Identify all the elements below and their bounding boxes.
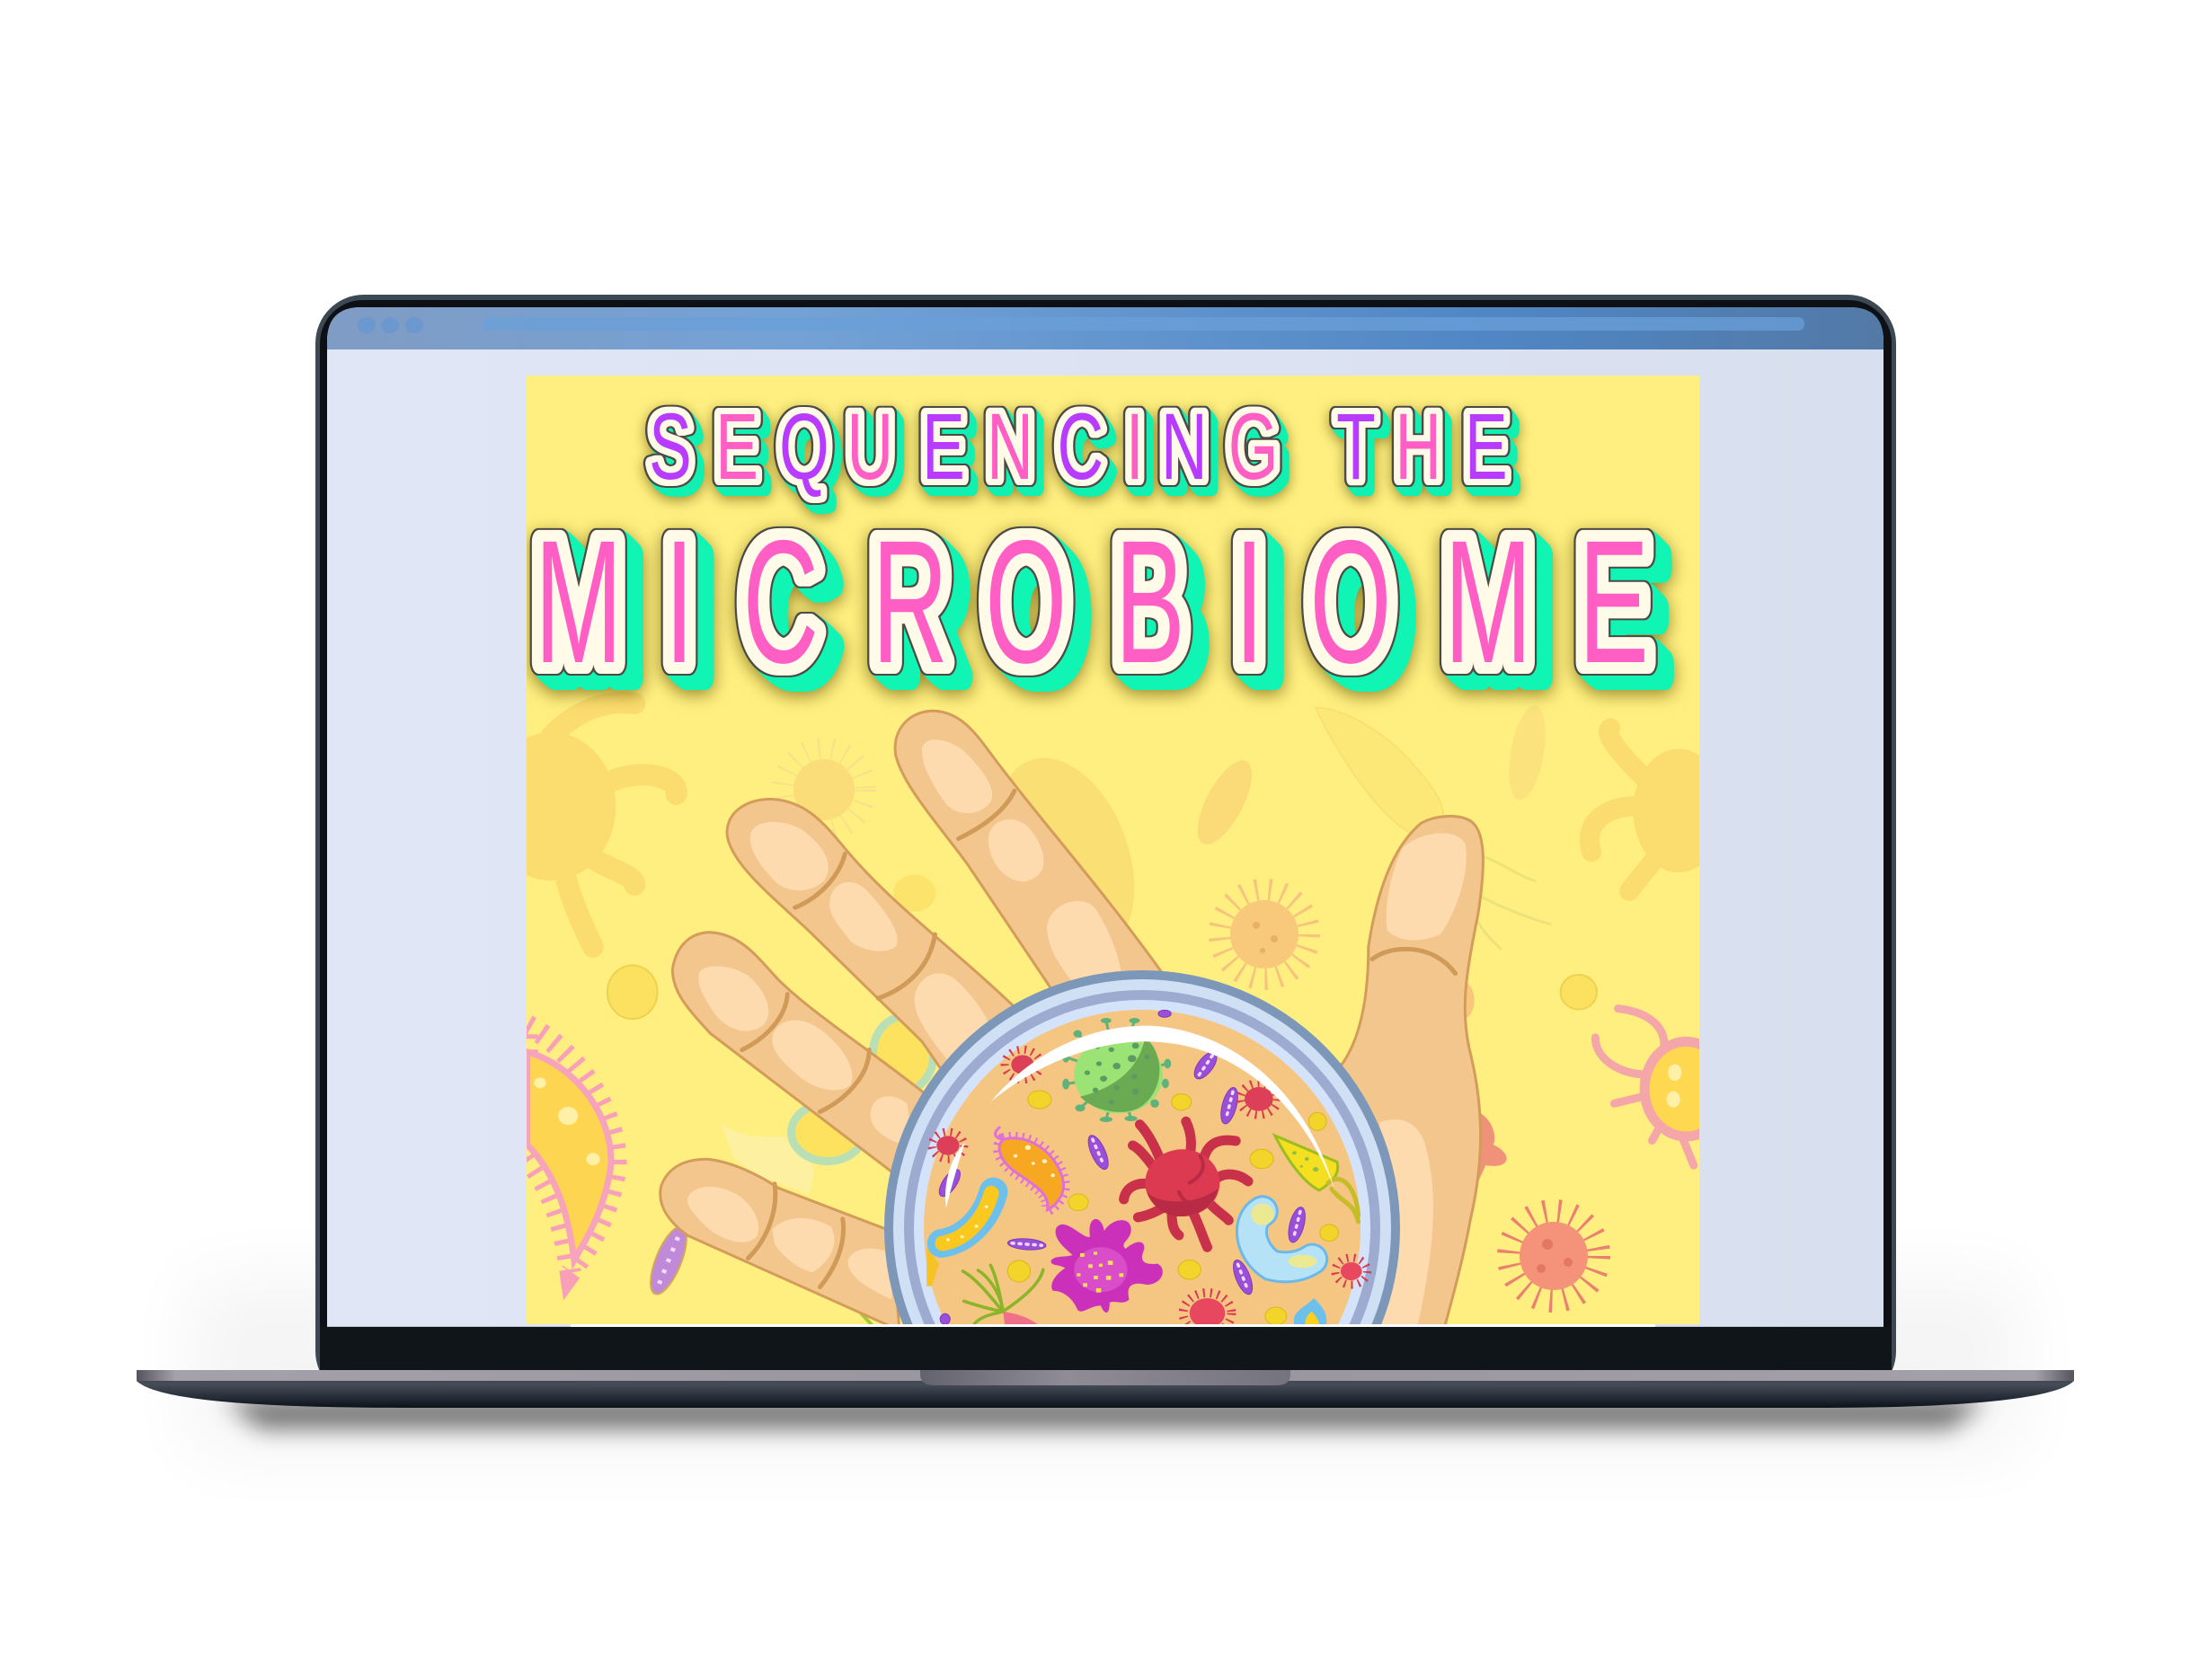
glass highlight — [945, 1026, 1335, 1208]
green plant microbe — [963, 1265, 1043, 1325]
orange sun microbe — [1219, 889, 1309, 979]
screen background — [327, 307, 1883, 1327]
title line: microbiome: MICROBIOME — [535, 504, 1649, 700]
title line: microbiome: MICROBIOME — [535, 504, 1649, 700]
purple pill microbe — [650, 1227, 687, 1295]
red tentacled microbe — [1124, 1121, 1248, 1247]
small red viruses — [932, 1049, 1367, 1333]
small yellow cells — [926, 1091, 1338, 1325]
center notch — [920, 1370, 1290, 1385]
green virus — [1062, 1018, 1171, 1122]
orange paisley microbe — [996, 1127, 1064, 1210]
bottom cut-off page strip — [327, 1324, 1883, 1327]
coral sun microbe — [1509, 1211, 1599, 1301]
spiky left microbe — [527, 1025, 616, 1273]
faded background microbes — [487, 703, 1724, 1331]
finger four — [895, 711, 1165, 1009]
screen area — [327, 307, 1883, 1327]
blue and yellow worm microbe — [942, 1192, 994, 1243]
laptop ambient shadow — [189, 1276, 2022, 1455]
magenta blob microbe — [1051, 1219, 1163, 1313]
title line: microbiome: MICROBIOME — [535, 504, 1649, 700]
laptop mockup illustration — [137, 295, 2074, 1450]
infographic poster panel — [527, 376, 1699, 1324]
laptop lid frame — [315, 295, 1896, 1400]
title line: sequencing the: SEQUENCING THE — [649, 394, 1508, 500]
title line: sequencing the: S EQU EN CING THE — [649, 394, 1508, 500]
metal hinge strip — [137, 1370, 2074, 1381]
finger three — [727, 799, 1021, 1074]
hand with fingers — [660, 711, 1483, 1343]
base body — [137, 1375, 2074, 1408]
browser toolbar — [327, 307, 1883, 349]
light blue U microbe — [1251, 1204, 1316, 1268]
finger two — [672, 933, 937, 1178]
laptop base — [137, 1370, 2074, 1408]
finger one — [660, 1159, 900, 1331]
yellow cone microbe — [1275, 1136, 1359, 1222]
lower bezel — [320, 1327, 1892, 1372]
pink right microbe — [1591, 1004, 1699, 1170]
thumb and palm — [1126, 817, 1483, 1343]
purple oval cells — [935, 1010, 1308, 1324]
title line: sequencing the: SEQUENCING THE — [649, 394, 1508, 500]
pale sun microbe — [783, 748, 865, 831]
petri dish rings — [884, 970, 1400, 1486]
microbes in the dish — [926, 1010, 1367, 1333]
blue and yellow bottom microbe — [1294, 1298, 1326, 1325]
